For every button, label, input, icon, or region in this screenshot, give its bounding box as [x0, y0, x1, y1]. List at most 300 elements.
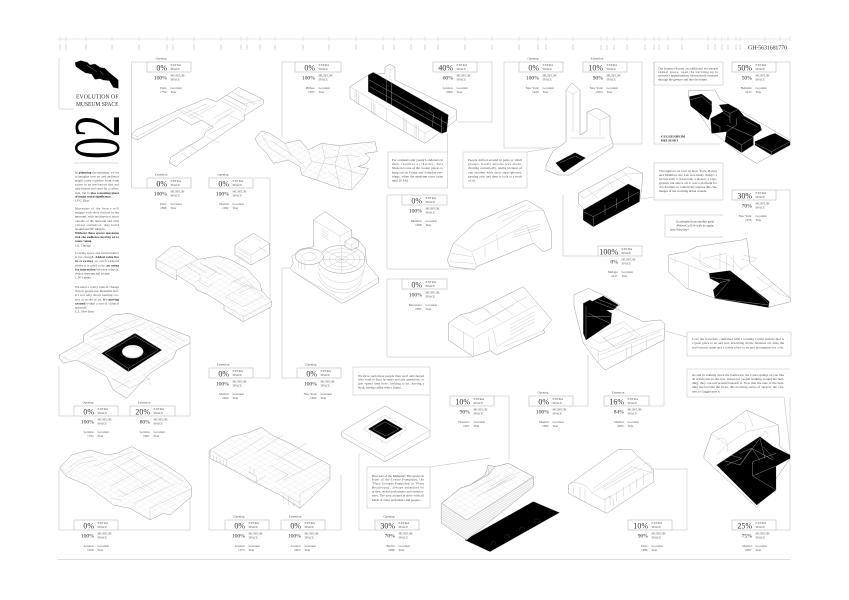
- stat: London 1793: Location: [98, 430, 109, 434]
- timeline header: 2015: [727, 44, 730, 50]
- timeline header: 1992: [246, 44, 249, 50]
- intro text column: risk the audience moving on to: [75, 235, 119, 239]
- timeline header: 2010: [545, 44, 548, 50]
- document code: GH-5631681770: [748, 46, 787, 52]
- label: Guggenheim Helsinki: HELSINKI: [661, 138, 679, 142]
- stat: New York 1976 30/70: Year: [756, 218, 762, 222]
- stat: Madrid 2004 extension: 2004: [222, 396, 229, 400]
- stat: Madrid 1992 second opening: 1992: [542, 424, 549, 428]
- stat: Mumbai 1998: EXTRA: [426, 196, 437, 200]
- stat: Helsinki 2015 50/50: Year: [756, 90, 762, 94]
- text: goodnight: #WaveCy2014 with us again: [677, 224, 714, 228]
- stat: New York 2004 10/90: MUSEUM: [606, 73, 621, 77]
- timeline header: 2008: [518, 44, 521, 50]
- title: EVOLUTION OF: [76, 94, 119, 100]
- stat: Barcelona 1995: 100%: [409, 292, 422, 298]
- stat: New York 2004 10/90: New York: [590, 86, 603, 90]
- stat: London 2001 20/80: SPACE: [154, 421, 163, 425]
- intro text column: Without these spaces museums: [75, 231, 120, 235]
- text: waterfall: [665, 331, 791, 356]
- stat: Madrid 2004 extension: SPACE: [232, 373, 242, 377]
- stat: Bilbao 1997: [295, 62, 341, 94]
- stat: Mumbai 1998: 100%: [409, 208, 422, 214]
- stat: New York 1929: Year: [542, 90, 549, 94]
- intro text column: for interaction between schools,: [75, 267, 119, 272]
- stat: Florence 1927 10/90: Location: [474, 420, 485, 424]
- stat: Malaga 2015 100/0: 100%: [599, 247, 618, 256]
- stat: London 2003 extension: Year: [304, 548, 311, 552]
- stat: London 1793: 100%: [81, 419, 94, 425]
- stat: London 1973: SPACE: [248, 535, 258, 539]
- stat: Malaga 2015 100/0: SPACE: [622, 261, 631, 265]
- intro text column: J.F.G. Diaz: [75, 198, 89, 202]
- stat: Madrid 2005 16/84: Year: [628, 424, 634, 428]
- stat: Berlin 1998: SPACE: [398, 525, 408, 529]
- intro text column: to imagine how art and audience: [75, 174, 120, 178]
- text: Tate residents: hang out on Friday and Saturday eve-: [392, 170, 443, 174]
- stat: New York 2004 10/90: 2004: [596, 90, 603, 94]
- stat: New York 2004 10/90: SPACE: [606, 77, 616, 81]
- stat: Malaga 2015 100/0: Location: [622, 270, 633, 274]
- text: waterfall: Love the waterfall, combined with a rotating Calder mobile that is: [692, 337, 785, 342]
- stat: London 2000 40/60: 2000: [446, 90, 453, 94]
- stat: Helsinki 2015 50/50: Location: [756, 86, 767, 90]
- stat: Madrid 2007 25/75: 25%: [737, 521, 752, 530]
- stat: New York 1929: SPACE: [542, 67, 552, 71]
- stat: London 1793: 0%: [83, 407, 94, 416]
- stat: New York 1929: SPACE: [542, 77, 552, 81]
- stat: London 2000 40/60: 60%: [443, 75, 453, 81]
- intro text column: around within a sort of cultural: [75, 301, 119, 305]
- timeline header: 2014: [707, 44, 710, 50]
- stat: New York 1976 30/70: New York: [739, 214, 752, 218]
- stat: London 1973: MUSEUM: [248, 531, 263, 535]
- timeline header: 1898: [85, 44, 88, 50]
- text: internet room: through the gesture and into the future.: [658, 78, 708, 82]
- stat: London 2001 20/80: London: [140, 430, 150, 434]
- stat: Madrid 2007 25/75: [732, 520, 776, 552]
- logo icon: plan silhouette: [75, 61, 118, 88]
- intro text column: around specific subjects.: [75, 227, 106, 231]
- text: people drifted: chatting contentedly, taking pictures of: [468, 166, 523, 171]
- text: best part: [367, 458, 490, 508]
- text: more people: just spend time here, looking at art, having a: [357, 382, 425, 386]
- text: Tate residents: For residents and young Londoners in: [392, 158, 443, 162]
- stat: Florence 1927 10/90: [450, 396, 494, 428]
- stat: Paris 1792: Location: [170, 86, 182, 90]
- stat: Florence 1927 10/90: EXTRA: [474, 397, 485, 401]
- stat: Berlin 1998: SPACE: [398, 535, 408, 539]
- stat: Malaga 2015 100/0: 0%: [610, 259, 618, 265]
- stat: New York 1992: 100%: [304, 381, 317, 387]
- timeline header: 2013: [681, 44, 684, 50]
- text: people drifted: of art.: [468, 178, 476, 182]
- stat: Paris 1898: SPACE: [170, 183, 180, 187]
- intro text column: only houses and cares for a collec-: [75, 187, 119, 191]
- stat: Madrid 2004 extension: Year: [232, 396, 239, 400]
- stat: Paris 1792: EXTRA: [170, 63, 182, 67]
- building: Mumbai curved hall: [447, 200, 552, 269]
- timeline header: 1929: [138, 44, 141, 50]
- timeline header: 1992: [240, 44, 243, 50]
- intro text column: ates at works of art, it's moving: [75, 297, 119, 302]
- stat: Paris 1898: Extension: [155, 172, 168, 176]
- text: more people: who want to find lectures and ask questions, or: [358, 378, 425, 382]
- stat: Madrid 2004 extension: Location: [232, 392, 244, 396]
- stat: London 1973: EXTRA: [248, 521, 260, 525]
- stat: London 1973: London: [235, 544, 245, 548]
- text: Tate residents: [388, 133, 448, 188]
- stat: Mumbai 1998: SPACE: [426, 200, 435, 204]
- stat: London 1926: [74, 520, 118, 552]
- stat: Paris 1898: [147, 172, 191, 210]
- intro text column: In planning the museum, we try: [75, 170, 119, 175]
- stat: Florence 1927 10/90: 1927: [463, 424, 470, 428]
- stat: Barcelona 1995: MUSEUM: [426, 290, 440, 294]
- stat: Madrid 1992 second opening: MUSEUM: [552, 407, 567, 411]
- stat: New York 1992: SPACE: [320, 383, 330, 387]
- stat: New York 1929: 0%: [528, 63, 539, 72]
- intro text column: museum, with the physical space: [75, 215, 120, 220]
- stat: New York 1929: EXTRA: [542, 63, 554, 67]
- timeline header: 1792: [59, 44, 62, 50]
- stat: Madrid 2007 25/75: Madrid: [742, 544, 752, 548]
- stat: London 1926: Year: [98, 548, 104, 552]
- text: Lab tour: and Mumbai, the Lab was many things: a: [659, 173, 718, 178]
- text: more people: book, having coffee with a friend ...: [358, 386, 404, 390]
- stat: London 1793: SPACE: [98, 421, 107, 425]
- stat: Malaga 2015 100/0: [598, 246, 642, 278]
- stat: Paris 1898: 100%: [154, 191, 167, 197]
- stat: Madrid 1992 opening: Year: [232, 206, 239, 210]
- intro text column: It's not only about looking cre-: [75, 293, 119, 297]
- stat: Berlin 1998: 1998: [388, 548, 395, 552]
- text: Lab tour: lecture hall, a classroom, a theater, a play-: [659, 177, 717, 182]
- stat: Mumbai 1998: [402, 195, 447, 227]
- building: Guggenheim Bilbao: [255, 131, 377, 190]
- timeline header: 1973: [172, 44, 175, 50]
- timeline header: 2001: [382, 44, 385, 50]
- building: Tate Modern London: [350, 64, 457, 143]
- stat: Madrid 1992 second opening: [529, 390, 573, 428]
- stat: London 1973: Year: [248, 548, 255, 552]
- stat: New York 1976 30/70: SPACE: [756, 205, 765, 209]
- timeline header: 2004: [410, 44, 413, 50]
- stat: Bilbao 1997: SPACE: [318, 77, 328, 81]
- building: CaixaForum Madrid: [704, 410, 790, 507]
- stat: Barcelona 1995: 1995: [415, 307, 422, 311]
- stat: Madrid 2004 extension: MUSEUM: [232, 379, 247, 383]
- stat: Madrid 2005 16/84: 16%: [609, 397, 624, 406]
- stat: New York 1929: Opening: [528, 56, 539, 60]
- stat: Helsinki 2015 50/50: 50%: [737, 63, 752, 72]
- building: Louvre Paris: [132, 87, 263, 167]
- building: British Library London: [210, 427, 330, 508]
- stat: Berlin 1998: EXTRA: [398, 521, 410, 525]
- stat: London 2001 20/80: 80%: [140, 419, 150, 425]
- stat: Madrid 2007 25/75: SPACE: [756, 535, 765, 539]
- stat: London 1926: EXTRA: [98, 521, 109, 525]
- text: Caixa boulevard: As and in walking down the boulevard, the Caixa springs on you like: [692, 373, 785, 378]
- stat: New York 1976 30/70: Location: [756, 214, 767, 218]
- stat: Madrid 1992 second opening: Opening: [538, 390, 549, 394]
- stat: Madrid 1992 opening: MUSEUM: [232, 189, 247, 193]
- text: people drifted: People drifted around in pairs or small: [468, 158, 522, 162]
- stat: London 2003 extension: SPACE: [304, 535, 314, 539]
- stat: New York 1929: 1929: [532, 90, 539, 94]
- stat: Paris 1986 10/90: Year: [652, 548, 658, 552]
- timeline header: 1926: [111, 44, 114, 50]
- stat: London 1926: Location: [98, 544, 109, 548]
- stat: Malaga 2015 100/0: 2015: [611, 274, 618, 278]
- stat: Bilbao 1997: EXTRA: [318, 63, 330, 67]
- stat: Mumbai 1998: Location: [426, 219, 437, 223]
- stat: Madrid 1992 opening: SPACE: [232, 193, 242, 197]
- stat: Madrid 2005 16/84: Madrid: [614, 420, 624, 424]
- stat: Bilbao 1997: MUSEUM: [318, 73, 333, 77]
- text: best part: kinds of crazy performers and people...: [372, 498, 422, 502]
- stat: London 1973: [225, 514, 269, 552]
- stat: New York 1992: Year: [320, 396, 327, 400]
- text: best part: 'Place Georges Pompidou' or 'Place: [372, 482, 425, 486]
- stat: Malaga 2015 100/0: MUSEUM: [622, 257, 636, 261]
- stat: Paris 1898: MUSEUM: [170, 189, 185, 193]
- stat: Madrid 2007 25/75: MUSEUM: [756, 531, 770, 535]
- stat: Paris 1792: SPACE: [170, 77, 180, 81]
- stat: Madrid 2007 25/75: EXTRA: [756, 521, 767, 525]
- stat: Paris 1986 10/90: MUSEUM: [652, 531, 666, 535]
- stat: Madrid 2004 extension: EXTRA: [232, 369, 244, 373]
- stat: Mumbai 1998: MUSEUM: [426, 206, 440, 210]
- stat: Bilbao 1997: Year: [318, 90, 325, 94]
- stat: London 1973: Opening: [234, 514, 245, 518]
- text: Caixa boulevard: ding has become the Even, this evolving series of 'tuck in' the visi-: [692, 385, 784, 390]
- stat: London 2003 extension: MUSEUM: [304, 531, 319, 535]
- stat: New York 2004 10/90: [583, 56, 627, 94]
- stat: Madrid 2005 16/84: SPACE: [628, 411, 637, 415]
- stat: Madrid 1992 opening: 100%: [216, 191, 229, 197]
- stat: London 1926: London: [84, 544, 94, 548]
- text: Lab tour: ground, but above all, it was a platform for: [659, 181, 718, 186]
- stat: Malaga 2015 100/0: SPACE: [622, 251, 631, 255]
- text: waterfall: roof terrace, quiet and a lovely place to sit and decompress for a bit.: [692, 346, 784, 350]
- building: Guggenheim Helsinki: [688, 90, 790, 163]
- stat: Madrid 1992 second opening: 0%: [538, 397, 549, 406]
- timeline header: 2011: [600, 44, 603, 50]
- text: goodnight: Goodnight from another great: [676, 220, 714, 224]
- stat: New York 2004 10/90: Extension: [591, 56, 604, 60]
- intro text column: zones to an institution that not: [75, 183, 119, 187]
- stat: London 2000 40/60: SPACE: [456, 67, 466, 71]
- intro text column: We need a really radical change: [75, 285, 120, 289]
- stat: Madrid 2004 extension: SPACE: [232, 383, 242, 387]
- stat: Bilbao 1997: 0%: [304, 63, 315, 72]
- stat: Madrid 2007 25/75: SPACE: [756, 525, 765, 529]
- stat: London 2000 40/60: EXTRA: [456, 63, 468, 67]
- text: Lab tour: llenges of the evolving urban context.: [659, 189, 707, 193]
- timeline header: 2004: [424, 44, 427, 50]
- stat: Madrid 1992 opening: 1992: [222, 206, 229, 210]
- intro text column: of major social significance.: [75, 195, 112, 199]
- text: Tate residents: until 10 P.M.: [392, 178, 409, 182]
- stat: Berlin 1998: 70%: [385, 533, 395, 539]
- stat: Madrid 1992 opening: EXTRA: [232, 179, 244, 183]
- text: internet room: [654, 62, 723, 85]
- building: Centre Pompidou Malaga: [578, 167, 643, 227]
- stat: New York 1992: EXTRA: [320, 369, 332, 373]
- text: Lab tour: city dwellers to collectively explore this cha-: [659, 185, 717, 189]
- stat: New York 1992: 0%: [306, 369, 317, 378]
- stat: Paris 1986 10/90: EXTRA: [652, 521, 663, 525]
- stat: Helsinki 2015 50/50: SPACE: [756, 67, 765, 71]
- stat: Barcelona 1995: EXTRA: [426, 280, 437, 284]
- stat: Madrid 2007 25/75: 2007: [745, 548, 752, 552]
- stat: Bilbao 1997: Location: [318, 86, 330, 90]
- stat: Mumbai 1998: Mumbai: [411, 219, 422, 223]
- stat: London 1793: SPACE: [98, 411, 107, 415]
- intro text column: might come together from from: [75, 178, 120, 182]
- stat: Madrid 1992 opening: Opening: [218, 172, 229, 176]
- timeline header: 2013: [658, 44, 661, 50]
- building: Berlin facade with black ground: [442, 463, 559, 552]
- stat: London 2001 20/80: SPACE: [154, 411, 163, 415]
- stat: Bilbao 1997: 100%: [302, 75, 315, 81]
- stat: London 1926: 1926: [87, 548, 94, 552]
- text: goodnight: next Saturday!: [670, 228, 689, 232]
- intro text column: [75, 170, 120, 314]
- building: Tate Modern switch house with black volume: [59, 313, 190, 398]
- intro text column: J.O. Chicago: [75, 243, 92, 247]
- stat: Paris 1792: SPACE: [170, 67, 180, 71]
- timeline header: 2014: [721, 44, 724, 50]
- stat: Madrid 2005 16/84: SPACE: [628, 401, 637, 405]
- text: Lab tour: Throughout its tour in New York, Berlin: [659, 169, 717, 174]
- stat: London 2003 extension: SPACE: [304, 525, 314, 529]
- stat: Madrid 2004 extension: Madrid: [219, 392, 229, 396]
- stat: Mumbai 1998: 0%: [411, 196, 422, 205]
- stat: Florence 1927 10/90: 90%: [460, 409, 470, 415]
- stat: Malaga 2015 100/0: EXTRA: [622, 247, 633, 251]
- stat: Paris 1898: SPACE: [170, 193, 180, 197]
- stat: Paris 1986 10/90: 1986: [641, 548, 648, 552]
- timeline header: 1997: [302, 44, 305, 50]
- text: internet room: The Internet Room, an additional six-people: [658, 66, 719, 72]
- text: internet room: annual space, open the building up to: [658, 70, 718, 75]
- chapter number: 02: [61, 115, 134, 159]
- text: Tate residents: nings, when the museum stays open: [392, 174, 443, 179]
- stat: Madrid 2005 16/84: Extension: [612, 390, 625, 394]
- timeline header: 2012: [626, 44, 629, 50]
- stat: Florence 1927 10/90: Year: [474, 424, 480, 428]
- timeline header: 2009: [537, 44, 540, 50]
- text: people drifted: passing over and then to look at a work: [468, 174, 522, 178]
- stat: Madrid 2005 16/84: EXTRA: [628, 397, 639, 401]
- stat: New York 2004 10/90: SPACE: [606, 67, 616, 71]
- stat: Berlin 1998: Location: [398, 544, 410, 548]
- timeline header: 1976: [193, 44, 196, 50]
- stat: Madrid 1992 opening: Location: [232, 202, 244, 206]
- stat: Malaga 2015 100/0: Malaga: [608, 270, 618, 274]
- text: goodnight: [665, 215, 723, 237]
- stat: New York 1976 30/70: SPACE: [756, 195, 765, 199]
- intro text column: in creating an environment: [75, 259, 119, 263]
- stat: Madrid 2004 extension: Extension: [217, 362, 230, 366]
- stat: Berlin 1998: MUSEUM: [398, 531, 413, 535]
- stat: London 1926: 100%: [81, 533, 94, 539]
- building: Guggenheim New York: [290, 212, 378, 303]
- title: [76, 94, 119, 108]
- stat: New York 1992: SPACE: [320, 373, 330, 377]
- stat: London 2001 20/80: Extension: [138, 400, 151, 404]
- text: people drifted: groups, hardly anyone was alone,: [468, 162, 522, 167]
- stat: New York 1992: MUSEUM: [320, 379, 335, 383]
- stat: London 2003 extension: London: [291, 544, 301, 548]
- timeline header: 1997: [274, 44, 277, 50]
- text: best part: ners. The area around is alive with all: [372, 494, 424, 498]
- stat: London 1793: 1793: [87, 434, 94, 438]
- stat: New York 1929: 100%: [526, 75, 539, 81]
- text: best part: artists, street performers and entertai-: [372, 490, 424, 495]
- stat: Berlin 1998: Year: [398, 548, 405, 552]
- stat: Helsinki 2015 50/50: [732, 62, 776, 94]
- timeline header: 1793: [65, 44, 68, 50]
- stat: Paris 1986 10/90: 90%: [638, 533, 648, 539]
- intro text column: engage with their visitors in the: [75, 211, 120, 215]
- stat: Berlin 1998: Opening: [384, 514, 395, 518]
- intro text column: a new venue.: [75, 239, 92, 243]
- timeline header: 1995: [259, 44, 262, 50]
- label: Guggenheim Helsinki: [661, 134, 685, 142]
- stat: New York 2004 10/90: 10%: [588, 63, 603, 72]
- text: best part: front of the Centre Pompidou, the: [372, 478, 425, 483]
- intro text column: outside of the museum and with: [75, 219, 119, 223]
- stat: London 2001 20/80: [130, 400, 175, 438]
- stat: Mumbai 1998: 1998: [415, 223, 422, 227]
- stat: London 2001 20/80: MUSEUM: [154, 417, 168, 421]
- stat: New York 2004 10/90: 90%: [593, 75, 603, 81]
- timeline header: 2012: [644, 44, 647, 50]
- stat: London 2003 extension: Location: [304, 544, 316, 548]
- stat: Berlin 1998: 30%: [380, 521, 395, 530]
- text: internet room: artwork's appropriation, interactively oriented: [658, 74, 718, 79]
- stat: Madrid 1992 second opening: 100%: [536, 409, 549, 415]
- text: Tate residents: their twenties or thirties, Tate: [392, 162, 444, 167]
- stat: Madrid 1992 opening: 0%: [218, 179, 229, 188]
- stat: Paris 1898: 1898: [160, 206, 167, 210]
- stat: London 1973: SPACE: [248, 525, 258, 529]
- text: people drifted: [463, 147, 557, 188]
- label: Guggenheim Helsinki: GUGGENHEIM: [661, 134, 685, 138]
- stat: Barcelona 1995: Year: [426, 307, 432, 311]
- stat: Paris 1792: Paris: [160, 86, 167, 90]
- stat: London 2001 20/80: 20%: [135, 407, 150, 416]
- stat: Mumbai 1998: SPACE: [426, 210, 435, 214]
- stat: London 1973: 0%: [234, 521, 245, 530]
- stat: Paris 1792: MUSEUM: [170, 73, 185, 77]
- text: Caixa boulevard: tors, to Gaggie puts it.: [692, 390, 721, 394]
- stat: Helsinki 2015 50/50: 50%: [742, 75, 752, 81]
- stat: New York 1976 30/70: EXTRA: [756, 191, 767, 195]
- stat: London 2003 extension: 100%: [288, 533, 301, 539]
- stat: New York 2004 10/90: EXTRA: [606, 63, 618, 67]
- stat: Florence 1927 10/90: MUSEUM: [474, 407, 488, 411]
- intro text column: virtual audiences: they build: [75, 223, 119, 227]
- building: Barcelona: [448, 287, 552, 357]
- stat: Barcelona 1995: [402, 279, 447, 311]
- building: Madrid cube: [235, 233, 269, 265]
- stat: New York 2004 10/90: Location: [606, 86, 618, 90]
- stat: London 2003 extension: [281, 514, 325, 552]
